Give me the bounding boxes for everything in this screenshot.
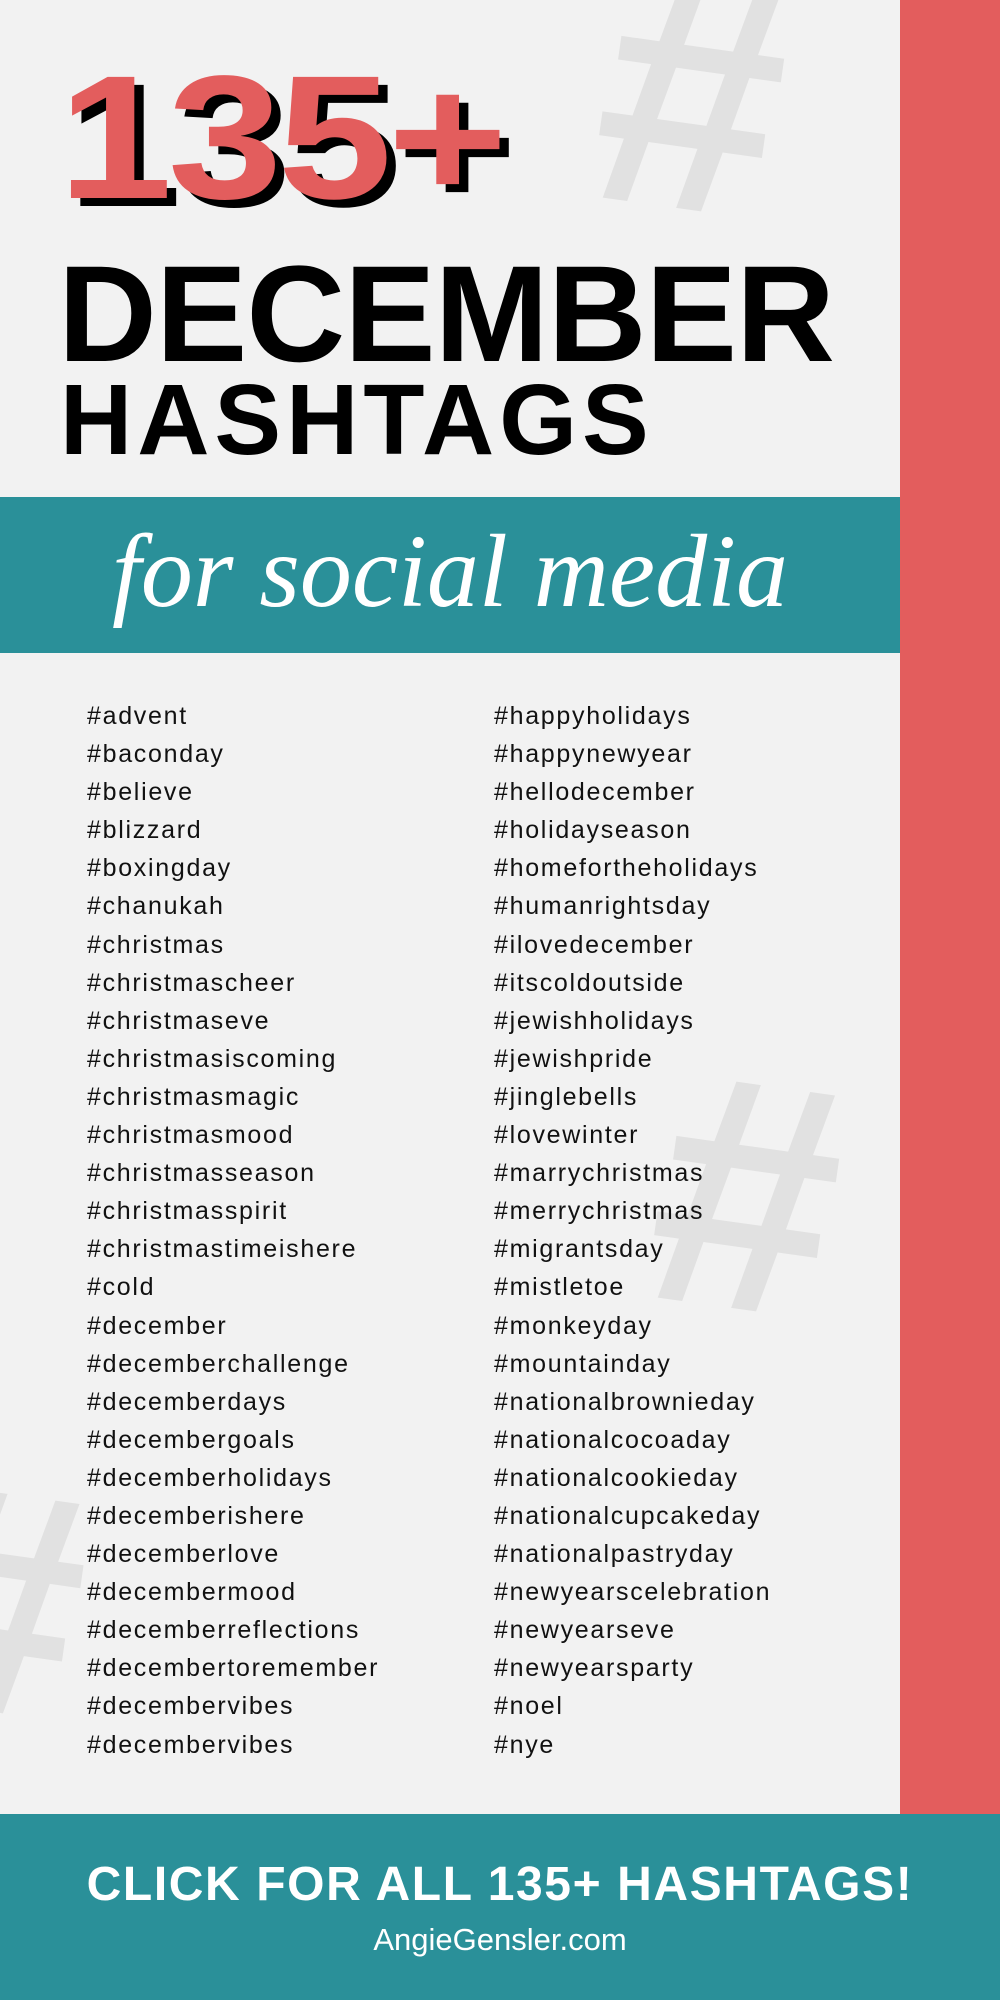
banner: for social media: for social media: [112, 514, 788, 629]
list: column 2: #nationalcocoaday: [494, 1426, 731, 1454]
title: DECEMBER: DECEMBER: [58, 238, 834, 391]
list: column 2: #hellodecember: [494, 778, 696, 806]
footer banner: [0, 1814, 1000, 2000]
list: column 1: #chanukah: [87, 892, 225, 920]
list: column 2: #ilovedecember: [494, 931, 694, 959]
red side bar: [900, 0, 1000, 1814]
list: column 2: #nationalcupcakeday: [494, 1502, 761, 1530]
title: 135+: 135+: [58, 40, 503, 236]
title: HASHTAGS: HASHTAGS: [60, 364, 654, 476]
list: column 1: #decemberdays: [87, 1388, 287, 1416]
list: column 1: #christmas: [87, 931, 225, 959]
list: column 1: #believe: [87, 778, 194, 806]
list: column 2: #newyearseve: [494, 1616, 676, 1644]
decoration: hash middle right: #: [630, 999, 863, 1390]
footer: call to action: CLICK FOR ALL 135+ HASHTAGS!: [87, 1858, 913, 1911]
list: column 1: #christmasiscoming: [87, 1045, 337, 1073]
list: column 1: #blizzard: [87, 816, 202, 844]
list: column 1: #decemberreflections: [87, 1616, 360, 1644]
list: column 1: #advent: [87, 702, 188, 730]
list: column 2: #homefortheholidays: [494, 854, 758, 882]
list: column 1: #decembermood: [87, 1578, 297, 1606]
list: column 1: #christmaseve: [87, 1007, 270, 1035]
list: column 1: #december: [87, 1312, 227, 1340]
list: column 1: #decemberholidays: [87, 1464, 333, 1492]
list: column 1: #decembergoals: [87, 1426, 296, 1454]
list: column 2: #merrychristmas: [494, 1197, 704, 1225]
banner: for social media: [0, 497, 900, 653]
footer: website: AngieGensler.com: [373, 1922, 627, 1957]
list: column 2: #mountainday: [494, 1350, 671, 1378]
list: column 1: #christmasspirit: [87, 1197, 288, 1225]
list: column 1: #christmasmood: [87, 1121, 294, 1149]
list: column 1: #decembervibes: [87, 1692, 294, 1720]
list: column 2: #noel: [494, 1692, 564, 1720]
list: column 2: #monkeyday: [494, 1312, 653, 1340]
list: column 2: #jewishpride: [494, 1045, 653, 1073]
list: column 2: [494, 702, 771, 1759]
list: column 2: #nationalpastryday: [494, 1540, 734, 1568]
list: column 1: #decemberchallenge: [87, 1350, 350, 1378]
list: column 1: #christmasmagic: [87, 1083, 300, 1111]
list: column 1: #christmastimeishere: [87, 1235, 357, 1263]
list: column 2: #holidayseason: [494, 816, 692, 844]
list: column 2: #newyearscelebration: [494, 1578, 771, 1606]
list: column 2: #humanrightsday: [494, 892, 711, 920]
list: column 1: #decemberlove: [87, 1540, 280, 1568]
list: column 2: #nationalcookieday: [494, 1464, 739, 1492]
list: column 2: #marrychristmas: [494, 1159, 704, 1187]
list: column 2: #migrantsday: [494, 1235, 664, 1263]
list: column 2: #itscoldoutside: [494, 969, 685, 997]
list: column 1: #baconday: [87, 740, 225, 768]
list: column 1: #boxingday: [87, 854, 232, 882]
list: column 2: #mistletoe: [494, 1273, 625, 1301]
list: column 2: #nationalbrownieday: [494, 1388, 756, 1416]
list: column 1: #christmasseason: [87, 1159, 316, 1187]
list: column 1: #decembervibes: [87, 1731, 294, 1759]
list: column 1: #decemberishere: [87, 1502, 306, 1530]
list: column 1: #decembertoremember: [87, 1654, 379, 1682]
list: column 1: #cold: [87, 1273, 155, 1301]
list: column 2: #jinglebells: [494, 1083, 638, 1111]
list: column 2: #jewishholidays: [494, 1007, 695, 1035]
list: column 2: #lovewinter: [494, 1121, 639, 1149]
list: column 2: #newyearsparty: [494, 1654, 694, 1682]
list: column 2: #happyholidays: [494, 702, 692, 730]
list: column 1: [87, 702, 379, 1759]
list: column 2: #happynewyear: [494, 740, 693, 768]
list: column 1: #christmascheer: [87, 969, 296, 997]
list: column 2: #nye: [494, 1731, 555, 1759]
